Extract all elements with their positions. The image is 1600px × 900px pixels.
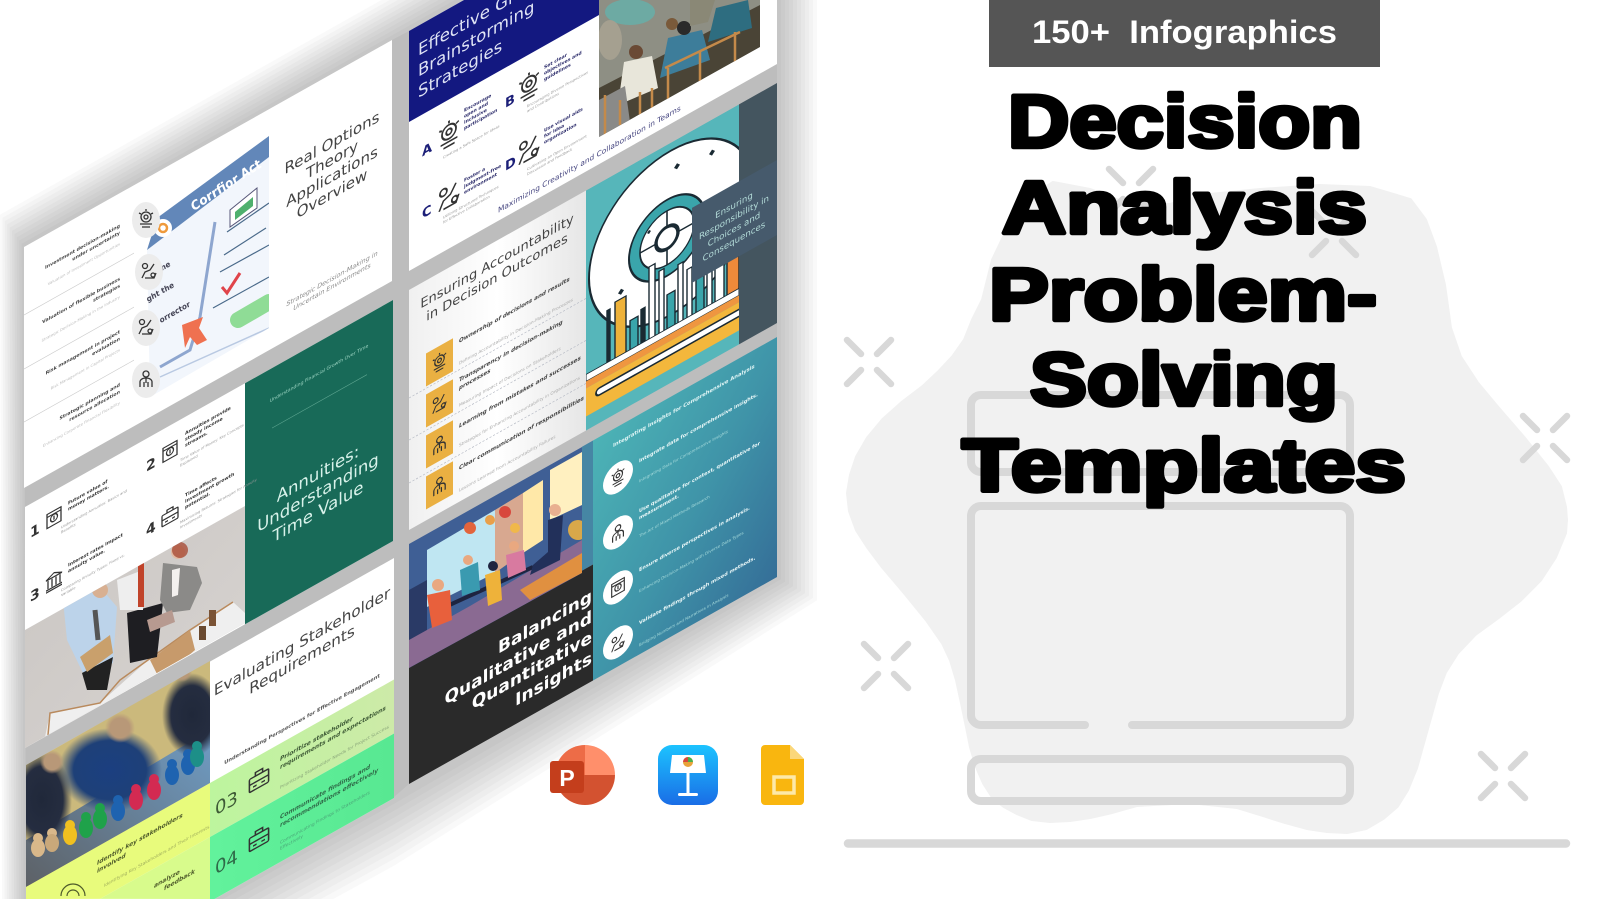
title: Decision Analysis Problem-Solving Templates bbox=[962, 80, 1406, 507]
item 01 and 02 text: Identify key stakeholders bbox=[97, 811, 183, 867]
option list: Risk management in project bbox=[46, 329, 121, 377]
numbered points: streams. bbox=[185, 430, 208, 449]
icon: Google Slides bbox=[761, 745, 804, 805]
numbered points: steady income bbox=[185, 416, 223, 443]
title: annuities: Time Value bbox=[272, 478, 363, 548]
strategy B bbox=[505, 39, 588, 126]
insight list: Use qualitative for context, quantitative for bbox=[639, 441, 760, 514]
strategy C bbox=[422, 156, 502, 237]
slide: Ensuring Accountability in Decision Outcomes bbox=[409, 83, 777, 530]
option list: evaluation bbox=[92, 336, 120, 358]
slide: Effective Group Brainstorming Strategies bbox=[409, 0, 777, 271]
insight list: The Art of Mixed Methods Research bbox=[638, 494, 710, 540]
numbered points: Time Value of Money: Key Concepts bbox=[179, 422, 244, 463]
numbered points: Interest rates impact bbox=[68, 532, 123, 569]
photo: meeting with pawns bbox=[26, 661, 210, 887]
photo: team at table bbox=[595, 0, 765, 140]
insight list: Integrate data for comprehensive insights. bbox=[639, 392, 758, 464]
item 01 and 02 text: involved bbox=[97, 851, 126, 875]
insight list: Enhancing Decision-Making with Diverse Data Types bbox=[639, 530, 744, 594]
title: stakeholders: Requirements bbox=[249, 621, 355, 698]
photo: business people with chart bbox=[25, 506, 245, 748]
title: balancing: Insights bbox=[515, 648, 592, 711]
top banner bbox=[989, 0, 1380, 67]
accountability list: Learning from mistakes and successes bbox=[459, 354, 581, 430]
numbered points: Comparing Annuity Types: Fixed vs. bbox=[61, 552, 125, 593]
title: real options: Overview bbox=[297, 165, 367, 222]
option list bbox=[42, 223, 121, 449]
item 03: 03 bbox=[215, 786, 238, 820]
title: balancing bbox=[445, 586, 592, 751]
laptop outline illustration bbox=[971, 395, 1350, 801]
item 03: requirements and expectations bbox=[280, 704, 386, 771]
insight list: Validate findings through mixed methods. bbox=[639, 555, 755, 626]
numbered points: annuity value. bbox=[68, 548, 105, 575]
slide: Balancing Qualitative and Quantitative Insights bbox=[405, 337, 777, 784]
insight list: Bridging Numbers and Narratives in Analysis bbox=[639, 592, 729, 648]
insight list: Integrating Data for Comprehensive Insights bbox=[639, 428, 729, 484]
slide stack shadow bbox=[0, 0, 817, 899]
accountability list bbox=[409, 263, 586, 522]
strategy D: Cultivating an Open Environment bbox=[527, 133, 587, 172]
numbered points: Maximizing Returns: Strategies for Annuity bbox=[180, 476, 258, 525]
strategy A: Encourage bbox=[464, 93, 492, 114]
item 04: Communicate findings and bbox=[280, 763, 371, 821]
strategy A bbox=[422, 88, 500, 172]
option list: Valuation of flexible business bbox=[42, 276, 120, 326]
heading: integrating insights: Integrating Insights for Comprehensive Analysis bbox=[613, 364, 755, 449]
item 01 and 02 text: analyze bbox=[154, 868, 180, 890]
illustration: corrective action chart: ght the bbox=[144, 280, 176, 304]
strategy A: open and bbox=[464, 101, 488, 120]
option list: Strategic planning and bbox=[60, 382, 120, 422]
strategy A: A bbox=[422, 140, 432, 160]
title: real options: Real Options bbox=[285, 107, 379, 178]
insight list: Ensure diverse perspectives in analysis. bbox=[639, 506, 750, 573]
illustration: team meeting bbox=[409, 447, 582, 668]
caption: responsibility bbox=[692, 160, 777, 283]
title: balancing: Balancing bbox=[498, 586, 592, 659]
accountability list: Strategies for Enhancing Accountability in Organizations bbox=[459, 375, 581, 449]
option list: Strategic Decision-Making in the Industry bbox=[42, 294, 121, 343]
item 01 and 02 text: Identifying Key Stakeholders and Their Interests bbox=[104, 824, 210, 889]
item 03: Prioritizing Stakeholder Needs for Project Success bbox=[280, 724, 389, 791]
numbered points: Understanding Annuities: Basics and bbox=[61, 488, 127, 530]
strategy B: and Contributions bbox=[527, 91, 559, 114]
strategy D: for idea bbox=[544, 123, 564, 140]
numbered points: money matters. bbox=[68, 484, 109, 513]
illustration: corrective action chart: me bbox=[156, 259, 172, 274]
numbered points: 3 bbox=[30, 584, 40, 606]
strategy C: C bbox=[422, 202, 432, 222]
numbered points: Explained bbox=[180, 453, 198, 468]
option icons bbox=[132, 202, 163, 398]
insight list bbox=[603, 382, 760, 669]
title: accountability: in Decision Outcomes bbox=[426, 231, 568, 325]
numbered points: Future value of bbox=[68, 478, 108, 507]
caption: responsibility: Choices and bbox=[708, 210, 760, 250]
illustration: target and bar chart bbox=[586, 104, 739, 430]
accountability list: Lessons Learned from Accountability Failures bbox=[459, 434, 556, 494]
tagline: Maximizing Creativity and Collaboration in Teams bbox=[498, 104, 681, 215]
strategy C: for Effective Collaboration bbox=[443, 194, 490, 225]
strategy C: Foster a bbox=[464, 166, 485, 184]
icon: gear cropped at frame bbox=[61, 884, 85, 896]
icon: Keynote bbox=[658, 745, 718, 805]
accountability list: processes bbox=[458, 367, 491, 392]
background blob bbox=[848, 183, 1566, 832]
strategy D: organization bbox=[544, 122, 577, 146]
caption: responsibility: Ensuring bbox=[715, 190, 753, 222]
title: real options: Applications bbox=[286, 142, 378, 211]
strategy B: objectives and bbox=[544, 50, 582, 77]
slide: Evaluating Stakeholder Requirements bbox=[12, 558, 394, 900]
illustration: corrective action chart bbox=[144, 136, 269, 397]
option list: resource allocation bbox=[69, 389, 120, 423]
yellow bands bbox=[26, 783, 210, 900]
item 04: 04 bbox=[215, 845, 238, 879]
title: Decision Analysis Problem-Solving Templates: Problem- bbox=[989, 253, 1377, 336]
numbered points: 2 bbox=[146, 453, 156, 476]
accountability list: Measuring Impact of Decisions on Stakeholders bbox=[459, 346, 561, 409]
caption: responsibility: Responsibility in bbox=[699, 193, 769, 243]
numbered points: Variable bbox=[61, 585, 76, 598]
item 04: recommendations effectively bbox=[280, 766, 379, 829]
title: brainstorming: Brainstorming bbox=[418, 0, 534, 82]
strategy C: Utilizing Structured Techniques bbox=[443, 184, 499, 220]
title: accountability: Ensuring Accountability bbox=[420, 211, 574, 312]
numbered points bbox=[30, 390, 258, 615]
strategy D bbox=[505, 104, 587, 189]
option list: strategies bbox=[93, 283, 120, 304]
illustration: corrective action chart: orrector bbox=[158, 299, 193, 325]
strategy C: judgment-free bbox=[463, 163, 502, 190]
item 04: Communicating Findings to Stakeholders bbox=[280, 790, 370, 846]
subtitle: real options: Strategic Decision-Making in bbox=[286, 250, 378, 308]
title: real options: Theory bbox=[305, 136, 358, 184]
strategy B: Set clear bbox=[544, 52, 567, 71]
accountability list: Ownership of decisions and results bbox=[459, 275, 570, 345]
title: annuities: Understanding bbox=[257, 450, 379, 537]
strategy B: Encouraging Diverse Perspectives bbox=[527, 70, 588, 109]
navy header bbox=[409, 0, 599, 122]
item 04 bbox=[215, 758, 379, 889]
numbered points: 1 bbox=[30, 520, 40, 542]
title: Decision Analysis Problem-Solving Templates: Analysis bbox=[1002, 166, 1367, 249]
insight list: measurement. bbox=[639, 493, 679, 521]
title: Decision Analysis Problem-Solving Templates: Templates bbox=[962, 424, 1406, 507]
option list: Valuation of Investment Opportunities bbox=[48, 241, 120, 287]
slide: Annuities Understanding Time Value bbox=[20, 300, 393, 760]
strategy A: inclusive bbox=[464, 107, 487, 126]
item 03 bbox=[215, 694, 389, 828]
strategy D: Use visual aids bbox=[544, 107, 583, 134]
numbered points: potential. bbox=[185, 491, 210, 511]
sparkle marks bbox=[847, 169, 1567, 798]
icon: PowerPoint: P bbox=[559, 765, 575, 791]
numbered points: Annuities provide bbox=[185, 405, 231, 437]
title: annuities: Annuities: bbox=[277, 442, 359, 507]
title: balancing: Quantitative bbox=[472, 627, 592, 714]
title: annuities bbox=[257, 431, 379, 556]
strategy A: participation bbox=[464, 107, 498, 132]
top banner: 150+ Infographics bbox=[1032, 14, 1337, 50]
numbered points: Time affects bbox=[185, 475, 217, 499]
subtitle: annuities: Understanding Financial Growth Over Time bbox=[270, 343, 368, 404]
item 01 and 02 text: feedback bbox=[164, 867, 196, 892]
slide: Real Options Theory Applications Overview bbox=[24, 40, 392, 488]
strategy C: environment bbox=[464, 171, 498, 196]
subtitle: stakeholders: Understanding Perspectives for Effective Engagement bbox=[224, 673, 380, 766]
accountability list: Transparency in decision-making bbox=[459, 319, 563, 384]
accountability list: Defining Accountability in Decision-Making Processes bbox=[459, 297, 574, 367]
accountability list: Clear communication of responsibilities bbox=[459, 394, 584, 472]
caption: responsibility: Consequences bbox=[703, 219, 765, 265]
numbered points: investment growth bbox=[185, 471, 235, 505]
title: brainstorming: Strategies bbox=[418, 37, 502, 103]
option list: Risk Management in Capital Projects bbox=[51, 347, 120, 391]
strategy D: D bbox=[505, 154, 516, 175]
title: stakeholders: Evaluating Stakeholder bbox=[214, 583, 390, 700]
option list: Investment decision-making bbox=[45, 223, 120, 271]
item 01 and 02 text bbox=[97, 796, 210, 900]
title: Decision Analysis Problem-Solving Templates: Decision bbox=[1008, 80, 1362, 163]
illustration: corrective action chart: Corrfior Act bbox=[187, 156, 265, 214]
title: real options bbox=[285, 107, 379, 229]
strategy B: guidelines bbox=[544, 62, 571, 83]
green title panel bbox=[245, 300, 393, 624]
title: Decision Analysis Problem-Solving Templates: Solving bbox=[1030, 338, 1338, 421]
option list: Enhancing Corporate Financial Flexibility bbox=[43, 400, 121, 448]
item 04: Effectively bbox=[280, 833, 303, 852]
item 03: Prioritize stakeholder bbox=[280, 714, 354, 763]
strategy B: B bbox=[505, 91, 515, 112]
base rule bbox=[848, 839, 1566, 848]
title: balancing: Qualitative and bbox=[445, 607, 592, 710]
numbered points: 4 bbox=[146, 517, 156, 540]
teal insight panel bbox=[593, 337, 777, 680]
numbered points: Investments bbox=[180, 513, 202, 530]
green bands bbox=[210, 680, 394, 837]
strategy D: Discussion and Feedback bbox=[527, 146, 573, 177]
strategy A: Creating a Safe Space for Ideas bbox=[443, 123, 500, 160]
slide background bbox=[409, 0, 777, 271]
option list: under uncertainty bbox=[72, 230, 121, 263]
dark side panel bbox=[739, 83, 777, 344]
icon: PowerPoint bbox=[550, 745, 615, 805]
subtitle: real options: Uncertain Environments bbox=[293, 261, 371, 312]
black title panel bbox=[409, 564, 593, 784]
numbered points: Benefits bbox=[61, 522, 76, 535]
